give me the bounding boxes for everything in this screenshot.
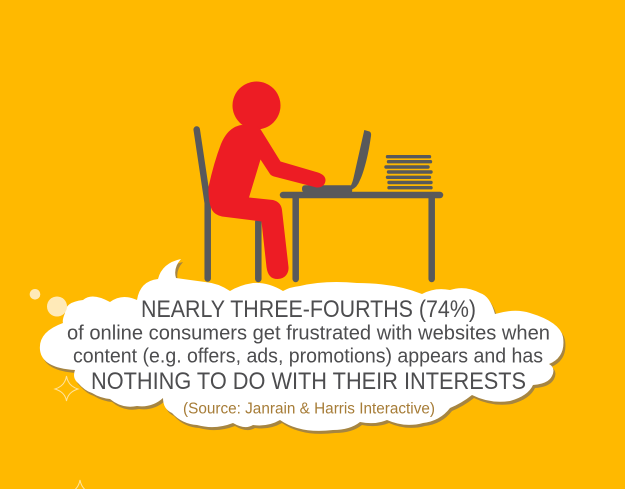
text: of online consumers: of online consumers get frustrated with websites when — [67, 322, 550, 344]
heading: nearly three-fourths: NEARLY THREE-FOURTHS (74%) — [141, 296, 476, 323]
icon: desk — [283, 195, 440, 279]
decorative bubble large — [47, 296, 67, 316]
icon: laptop — [302, 130, 371, 192]
icon: lower sparkle — [70, 480, 90, 489]
icon: red seated person — [208, 82, 326, 279]
text: source: (Source: Janrain & Harris Interactive) — [183, 400, 435, 418]
icon: stack of books — [386, 157, 431, 188]
cloud shadow — [42, 262, 565, 434]
icon: sparkle — [55, 376, 78, 401]
cloud body — [40, 259, 563, 431]
decorative bubble small — [30, 289, 40, 300]
heading: nothing to do: NOTHING TO DO WITH THEIR INTERESTS — [91, 368, 526, 395]
speech cloud — [40, 259, 565, 434]
icon: chair — [197, 130, 258, 279]
text: content appears: content (e.g. offers, ads, promotions) appears and has — [73, 346, 543, 368]
